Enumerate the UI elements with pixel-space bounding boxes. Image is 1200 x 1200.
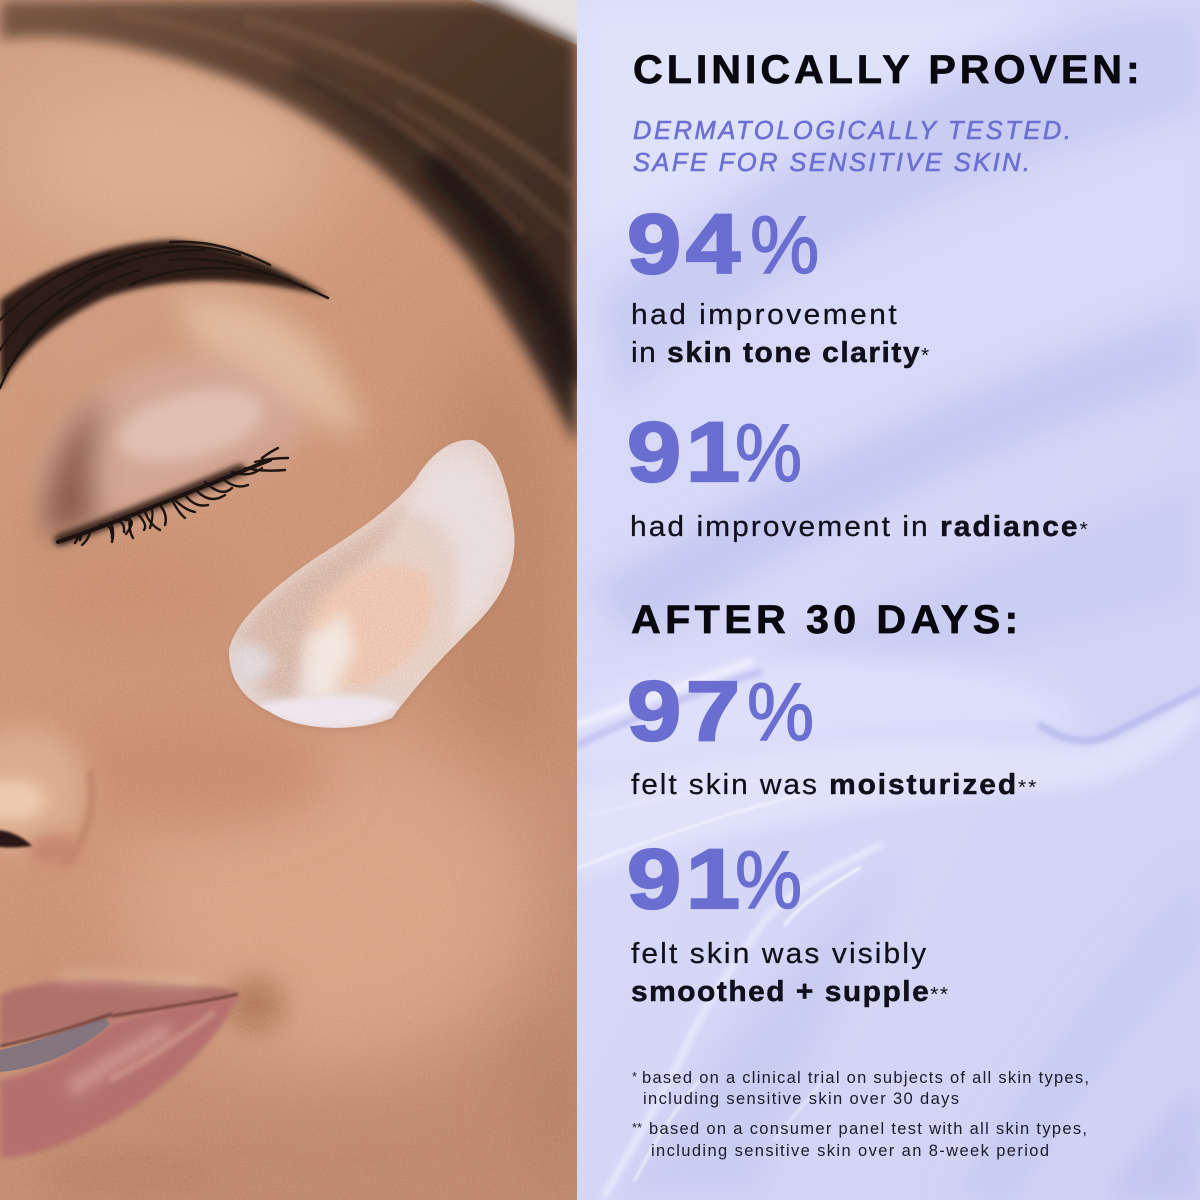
nose — [0, 728, 92, 866]
cream swatch on cheek — [229, 440, 515, 731]
title: CLINICALLY PROVEN: — [633, 47, 1140, 92]
brow hairs — [0, 242, 328, 388]
teeth — [0, 1018, 110, 1072]
hair — [0, 0, 577, 445]
footnotes — [632, 1069, 1089, 1160]
eye lashes — [58, 448, 288, 545]
eyelid — [40, 297, 361, 540]
stat: 97%: % — [747, 666, 814, 758]
stat: 94%: in skin tone clarity* — [631, 338, 929, 369]
stat: 91% radiance — [629, 420, 1088, 542]
stat: 91% smoothed: smoothed + supple** — [631, 977, 948, 1008]
footnotes: based on a consumer panel test with all skin types, — [649, 1120, 1087, 1138]
stat: 91% smoothed: felt skin was visibly — [631, 939, 926, 970]
stat: 97%: 97 — [627, 665, 745, 758]
cream swooshes — [577, 0, 1200, 1200]
footnotes: including sensitive skin over 30 days — [643, 1090, 959, 1108]
subtitle: DERMATOLOGICALLY TESTED. — [633, 117, 1071, 145]
stat: 97%: felt skin was moisturized** — [631, 770, 1036, 801]
stat: 91% smoothed: % — [735, 834, 802, 926]
footnotes: * — [632, 1069, 637, 1084]
stat: 91% radiance: % — [735, 407, 802, 499]
hair strands — [120, 15, 577, 370]
subtitle — [633, 120, 1068, 172]
subtitle: SAFE FOR SENSITIVE SKIN. — [633, 149, 1030, 177]
photo: face with cream swatch — [0, 0, 595, 1200]
stat: 91% radiance: 91 — [627, 406, 745, 499]
lips — [0, 977, 238, 1158]
panel: lavender cream texture — [577, 0, 1200, 1200]
footnotes: ** — [632, 1120, 642, 1135]
skin texture — [0, 440, 577, 1200]
footnotes: including sensitive skin over an 8-week period — [651, 1142, 1049, 1160]
stat: 94%: had improvement — [631, 300, 897, 331]
creases and glossy highlights — [577, 662, 1200, 1195]
white background corner — [470, 0, 577, 45]
eyebrow — [0, 240, 328, 390]
stat: 91% smoothed: 91 — [627, 833, 745, 926]
stat: 91% radiance: had improvement in radiance* — [630, 512, 1088, 543]
stat: 94% — [627, 198, 929, 369]
skin shading — [10, 70, 595, 1195]
stat: 91% smoothed — [627, 833, 948, 1008]
heading: after 30 days: AFTER 30 DAYS: — [631, 597, 1018, 642]
stat: 94%: 94 — [627, 198, 745, 291]
footnotes: based on a clinical trial on subjects of all skin types, — [642, 1069, 1089, 1087]
stat: 97% — [629, 680, 1036, 794]
stat: 94%: % — [750, 199, 819, 290]
